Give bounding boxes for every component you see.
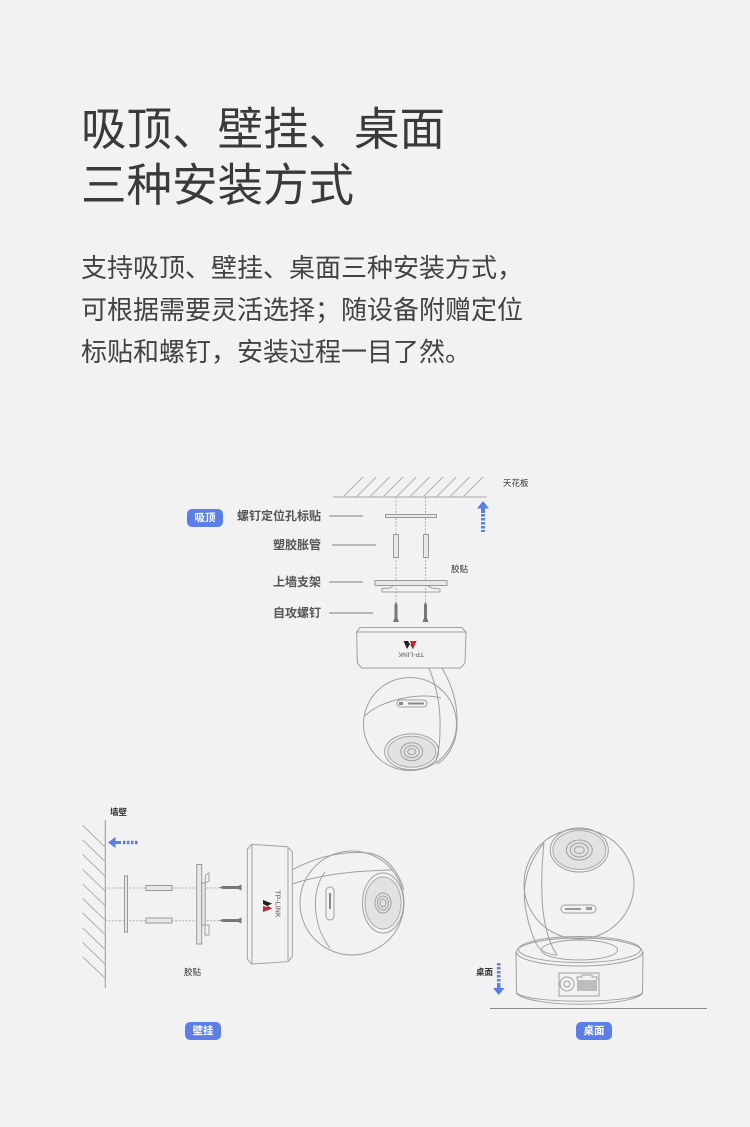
- ceiling surface: [333, 477, 487, 497]
- badge: wall mount: [185, 1022, 221, 1040]
- arrow: left: [108, 837, 139, 848]
- label: wall: 墙壁: [110, 807, 128, 817]
- description text: 可根据需要灵活选择；随设备附赠定位: [81, 295, 523, 325]
- guide lines: [396, 497, 426, 605]
- part: self-tapping screws: 自攻螺钉: [273, 605, 321, 620]
- panel: desktop: [476, 828, 707, 1040]
- badge: wall mount: 壁挂: [192, 1024, 214, 1037]
- part: bracket: [197, 864, 209, 944]
- title: [81, 104, 445, 211]
- badge: desktop: 桌面: [584, 1024, 604, 1037]
- part: anchors: [146, 886, 172, 923]
- description text: [81, 253, 523, 367]
- badge: ceiling mount: 吸顶: [194, 512, 216, 524]
- camera: ceiling mounted: [357, 628, 466, 770]
- camera: wall mounted: [247, 844, 404, 964]
- title: 吸顶、壁挂、桌面: [81, 104, 445, 155]
- panel: wall mount: [83, 807, 404, 1040]
- part: screws: [219, 884, 242, 924]
- part: mounting bracket: [273, 574, 447, 592]
- camera: wall mounted: TP-LINK: [274, 890, 280, 918]
- part: plastic anchors: [273, 534, 428, 558]
- title: 三种安装方式: [81, 160, 354, 211]
- label: desktop: 桌面: [476, 967, 494, 977]
- label: ceiling: 天花板: [503, 478, 529, 488]
- part: sticker: [124, 876, 128, 932]
- panel: ceiling mount: [187, 477, 529, 770]
- part: positioning sticker: [237, 508, 436, 523]
- arrow: upward: [477, 501, 489, 532]
- part: self-tapping screws: [273, 602, 428, 622]
- part: positioning sticker: 螺钉定位孔标贴: [237, 508, 321, 523]
- description text: 标贴和螺钉，安装过程一目了然。: [81, 337, 471, 367]
- camera: ceiling mounted: TP-LINK: [398, 650, 424, 658]
- part: plastic anchors: 塑胶胀管: [273, 537, 321, 552]
- label: adhesive: 胶贴: [184, 967, 202, 977]
- badge: ceiling mount: [187, 509, 223, 527]
- arrow: down: [493, 963, 504, 995]
- part: mounting bracket: 上墙支架: [273, 574, 321, 589]
- guide lines: [105, 888, 222, 921]
- description text: 支持吸顶、壁挂、桌面三种安装方式，: [81, 253, 523, 283]
- ground line: [490, 1008, 707, 1010]
- camera: desktop: [516, 828, 643, 1004]
- badge: desktop: [576, 1022, 612, 1040]
- label: adhesive: 胶贴: [451, 564, 469, 574]
- wall surface: [83, 820, 105, 988]
